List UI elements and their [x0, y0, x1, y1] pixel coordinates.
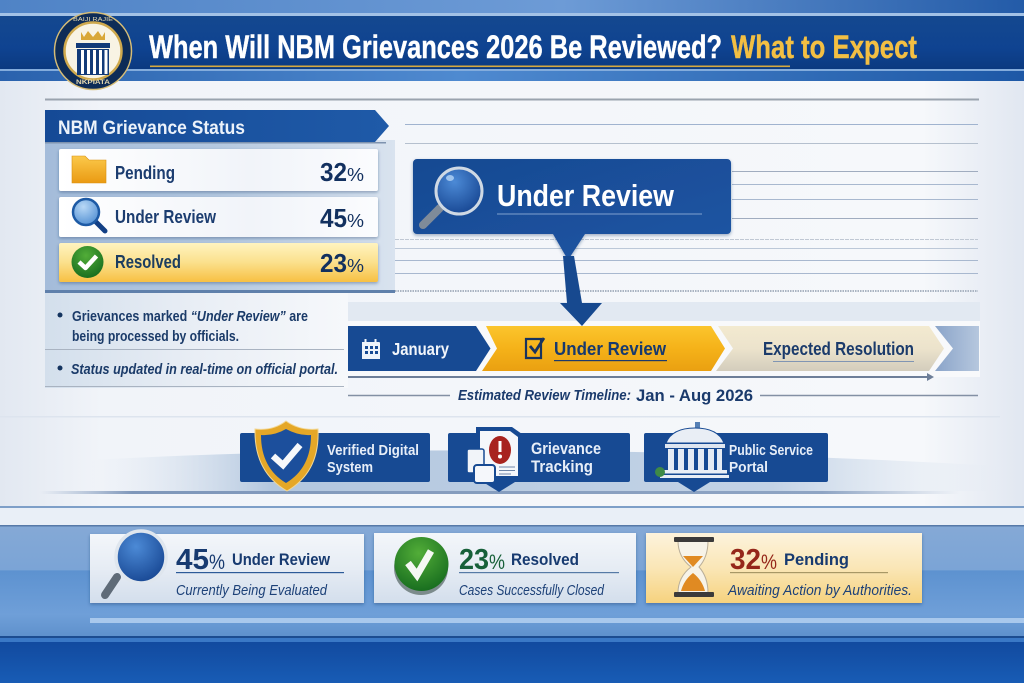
status row: under review: [59, 197, 378, 237]
feature: grievance tracking: [448, 427, 630, 492]
header banner: [0, 0, 1024, 81]
feature: verified digital system: System: [327, 460, 373, 476]
timeline step: under review: Under Review: [554, 339, 667, 359]
timeline step: january: January: [392, 339, 449, 359]
timeline: [348, 302, 980, 405]
status row: resolved: [59, 243, 378, 282]
timeline step: under review: [482, 326, 725, 371]
arrow: timeline progress: [348, 373, 934, 381]
icon: official seal: [54, 12, 132, 90]
status row: pending: Pending: [115, 162, 175, 183]
feature: verified digital system: [240, 421, 430, 491]
icon: official seal: BAIJI RAJIE: [73, 17, 113, 23]
note 1: [58, 309, 308, 345]
stat card: resolved: Resolved: [511, 550, 579, 569]
stat card: resolved: %: [489, 551, 505, 574]
status row: resolved: %: [347, 256, 364, 276]
timeline caption: Estimated Review Timeline:: [458, 388, 631, 404]
status row: pending: [59, 149, 378, 191]
stat card: resolved: 23: [459, 544, 489, 576]
timeline caption: Jan - Aug 2026: [636, 386, 753, 405]
ruled document lines: [45, 100, 979, 291]
note 1: Grievances marked “Under Review” are: [72, 309, 308, 325]
feature band: [0, 416, 1024, 508]
panel: grievance status: [45, 110, 395, 293]
icon: official seal: NKPIATA: [76, 80, 111, 86]
note 2: Status updated in real-time on official portal.: [71, 362, 338, 378]
icon: green check: [394, 537, 448, 595]
timeline step: expected resolution: [716, 326, 944, 371]
icon: large magnifier: [105, 531, 166, 595]
callout: under review: [413, 159, 731, 260]
status row: under review: %: [347, 211, 364, 231]
status row: resolved: 23: [320, 248, 347, 278]
arrow: callout to timeline: [560, 256, 602, 326]
status row: under review: Under Review: [115, 207, 217, 227]
stat card: pending: %: [761, 551, 777, 574]
stat card: pending: 32: [730, 544, 761, 576]
stat card: under review: %: [209, 551, 225, 574]
icon: hourglass: [674, 537, 714, 597]
icon: alert document: [467, 427, 522, 483]
feature: public service portal: [644, 422, 828, 492]
stat card: under review: Under Review: [232, 550, 331, 569]
status row: pending: %: [347, 165, 364, 185]
feature: public service portal: Public Service: [729, 443, 813, 459]
feature: verified digital system: Verified Digital: [327, 443, 419, 459]
timeline caption: [348, 386, 978, 405]
icon: government building: [655, 422, 729, 478]
stat card: pending: Awaiting Action by Authorities.: [727, 582, 912, 599]
status row: under review: 45: [320, 203, 347, 233]
stat card: under review: Currently Being Evaluated: [176, 582, 328, 599]
feature: grievance tracking: Tracking: [531, 458, 593, 476]
stat card: under review: 45: [176, 544, 209, 576]
stat card: pending: Pending: [784, 550, 849, 569]
feature: grievance tracking: Grievance: [531, 440, 601, 458]
note 1: being processed by officials.: [72, 329, 239, 345]
icon: magnifying glass: [423, 168, 482, 225]
feature: public service portal: Portal: [729, 460, 768, 476]
timeline step: expected resolution: Expected Resolution: [763, 339, 914, 359]
stat card: under review: [90, 531, 364, 603]
timeline step: january: [348, 326, 490, 371]
status row: pending: 32: [320, 157, 347, 187]
status row: resolved: Resolved: [115, 252, 181, 272]
panel heading: NBM Grievance Status: [58, 118, 245, 139]
stat card: resolved: Cases Successfully Closed: [459, 582, 605, 599]
callout: under review: Under Review: [497, 178, 675, 213]
icon: shield: [255, 421, 318, 491]
title: What to Expect: [731, 29, 917, 65]
title: When Will NBM Grievances 2026 Be Reviewed?: [149, 29, 722, 65]
stat card: resolved: [374, 533, 636, 603]
stat card: pending: [646, 533, 922, 603]
panel: notes: [45, 293, 348, 388]
panel heading: [45, 110, 389, 144]
lower blue band: [0, 508, 1024, 683]
timeline end segment: [935, 326, 979, 371]
